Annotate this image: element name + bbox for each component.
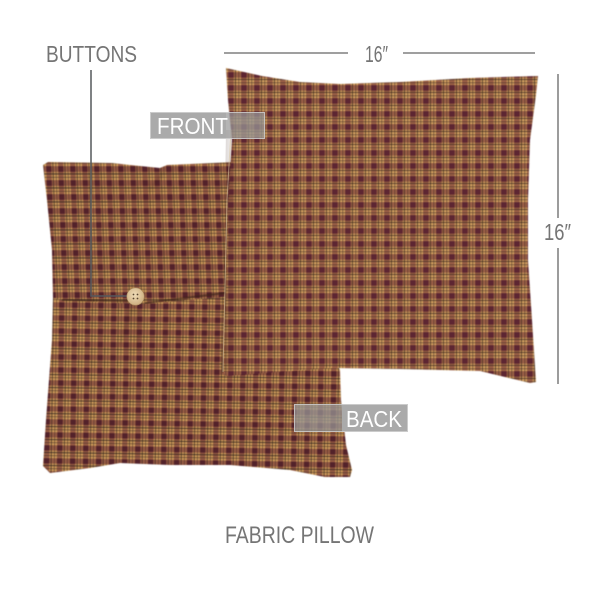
front label	[150, 112, 265, 139]
back label	[294, 404, 408, 432]
back pillow lower panel	[43, 292, 352, 477]
front label: FRONT	[157, 113, 228, 139]
icon: wooden button	[127, 288, 144, 305]
caption: FABRIC PILLOW	[225, 522, 374, 549]
buttons leader line	[91, 70, 127, 296]
buttons heading: BUTTONS	[46, 41, 137, 67]
width dimension: 16 inches: 16″	[365, 41, 388, 67]
back pillow upper panel	[43, 162, 235, 304]
back label: BACK	[346, 406, 402, 432]
back pillow	[43, 162, 352, 477]
front pillow	[222, 68, 538, 383]
height dimension: 16 inches: 16″	[544, 219, 571, 245]
